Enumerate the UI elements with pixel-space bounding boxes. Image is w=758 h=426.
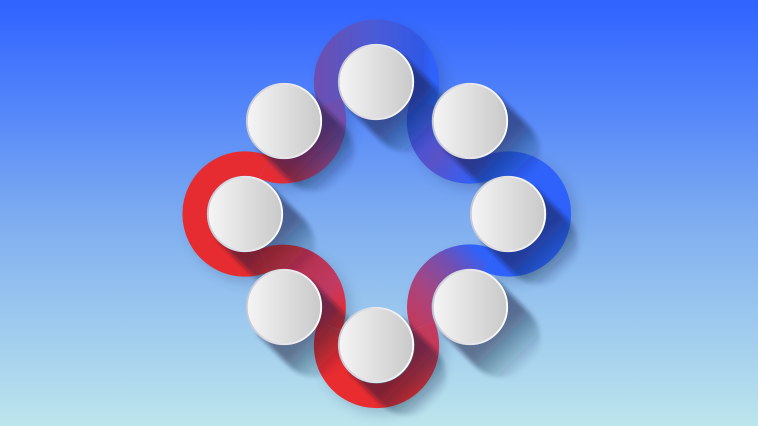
white circles <box>208 45 545 382</box>
circle: bottom <box>339 308 413 382</box>
ribbon segment: lower left curve <box>264 257 334 326</box>
circle: upper left <box>247 84 321 158</box>
long diagonal shadows of the circles <box>218 55 578 415</box>
ribbon segment: upper right curve <box>419 102 489 171</box>
circle: lower left <box>247 270 321 344</box>
ribbon segment: upper left curve <box>264 102 334 171</box>
circle: right <box>471 177 545 251</box>
circle: top <box>339 45 413 119</box>
ribbon soft shadow <box>201 38 565 402</box>
ribbon segment: bottom arc <box>326 326 427 396</box>
circle: upper right <box>433 84 507 158</box>
ribbon segment: left arc <box>195 164 264 264</box>
ribbon: wavy closed band from blue to red <box>195 32 559 396</box>
shadow: upper left circle <box>257 94 354 191</box>
ribbon segment: right arc <box>489 164 559 264</box>
ribbon segment: top arc <box>326 32 427 101</box>
circle: lower right <box>433 270 507 344</box>
ribbon segment: lower right curve <box>419 257 489 326</box>
shadow: bottom circle <box>349 318 446 415</box>
shadow: top circle <box>349 55 446 152</box>
shadow: right circle <box>481 187 578 284</box>
shadow: upper right circle <box>443 94 540 191</box>
shadow: lower right circle <box>443 280 540 377</box>
circle: left <box>208 177 282 251</box>
shadow: lower left circle <box>257 280 354 377</box>
shadow: left circle <box>218 187 315 284</box>
